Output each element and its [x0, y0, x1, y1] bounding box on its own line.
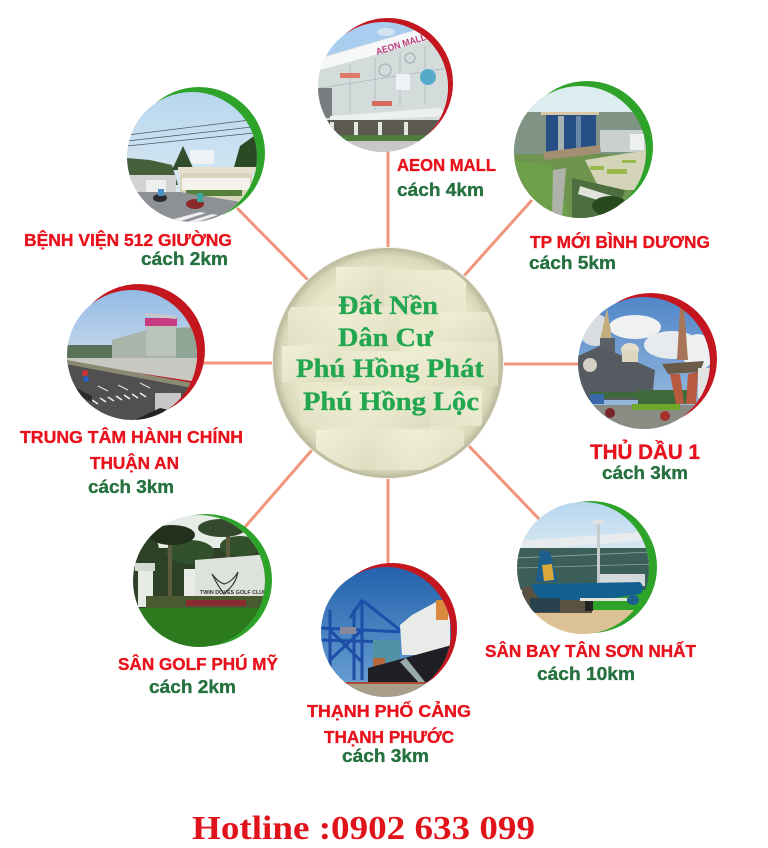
- label: AEON MALL: AEON MALL: [397, 155, 496, 175]
- label: SAN GOLF PHU MY: SÂN GOLF PHÚ MỸ: [118, 653, 278, 674]
- node: TP MOI BINH DUONG: [510, 80, 653, 225]
- node: SAN BAY TAN SON NHAT: [515, 500, 657, 638]
- node: AEON MALL: [318, 18, 453, 152]
- node: BENH VIEN 512 GIUONG: [125, 87, 265, 225]
- label: THANH PHO CANG: THẠNH PHỐ CẢNG: [307, 700, 471, 721]
- distance: SAN BAY TAN SON NHAT: cách 10km: [537, 664, 635, 684]
- label: TP MOI BINH DUONG: TP MỚI BÌNH DƯƠNG: [530, 231, 710, 252]
- hotline: Hotline :0902 633 099: [192, 810, 535, 847]
- centre title: Phú Hồng Lộc: [303, 387, 479, 416]
- distance: BENH VIEN 512 GIUONG: cách 2km: [141, 249, 228, 269]
- label: THANH PHUOC: THẠNH PHƯỚC: [324, 726, 454, 747]
- label: SAN BAY TAN SON NHAT: SÂN BAY TÂN SƠN NHẤT: [485, 640, 696, 661]
- distance: THANH PHUOC: cách 3km: [342, 746, 429, 766]
- centre title: Đất Nền: [338, 291, 439, 320]
- distance: SAN GOLF PHU MY: cách 2km: [149, 677, 236, 697]
- centre title: Dân Cư: [338, 323, 433, 352]
- label: THUAN AN: THUẬN AN: [90, 452, 179, 473]
- node: THU DAU 1: [575, 293, 717, 431]
- distance: THU DAU 1: cách 3km: [602, 463, 688, 483]
- distance: AEON MALL: cách 4km: [397, 180, 484, 200]
- distance: TP MOI BINH DUONG: cách 5km: [529, 253, 616, 273]
- node: SAN GOLF PHU MY: TWIN DOVES GOLF CLUB: [200, 590, 267, 596]
- centre title: [296, 291, 484, 416]
- distance: THUAN AN: cách 3km: [88, 477, 174, 497]
- label: BENH VIEN 512 GIUONG: BỆNH VIỆN 512 GIƯỜNG: [24, 229, 232, 250]
- connector lines: [200, 150, 580, 566]
- label: THU DAU 1: THỦ DẦU 1: [590, 440, 700, 464]
- node: THANH PHO CANG THANH PHUOC: [320, 563, 457, 702]
- node: SAN GOLF PHU MY: [130, 512, 272, 650]
- node: TRUNG TAM HANH CHINH THUAN AN: [60, 284, 205, 425]
- centre title: Phú Hồng Phát: [296, 354, 484, 383]
- label: TRUNG TAM HANH CHINH: TRUNG TÂM HÀNH CHÍNH: [20, 426, 243, 447]
- patchwork texture: [282, 267, 500, 470]
- centre circle: [272, 247, 504, 479]
- node: AEON MALL: AEON MALL: [375, 32, 428, 58]
